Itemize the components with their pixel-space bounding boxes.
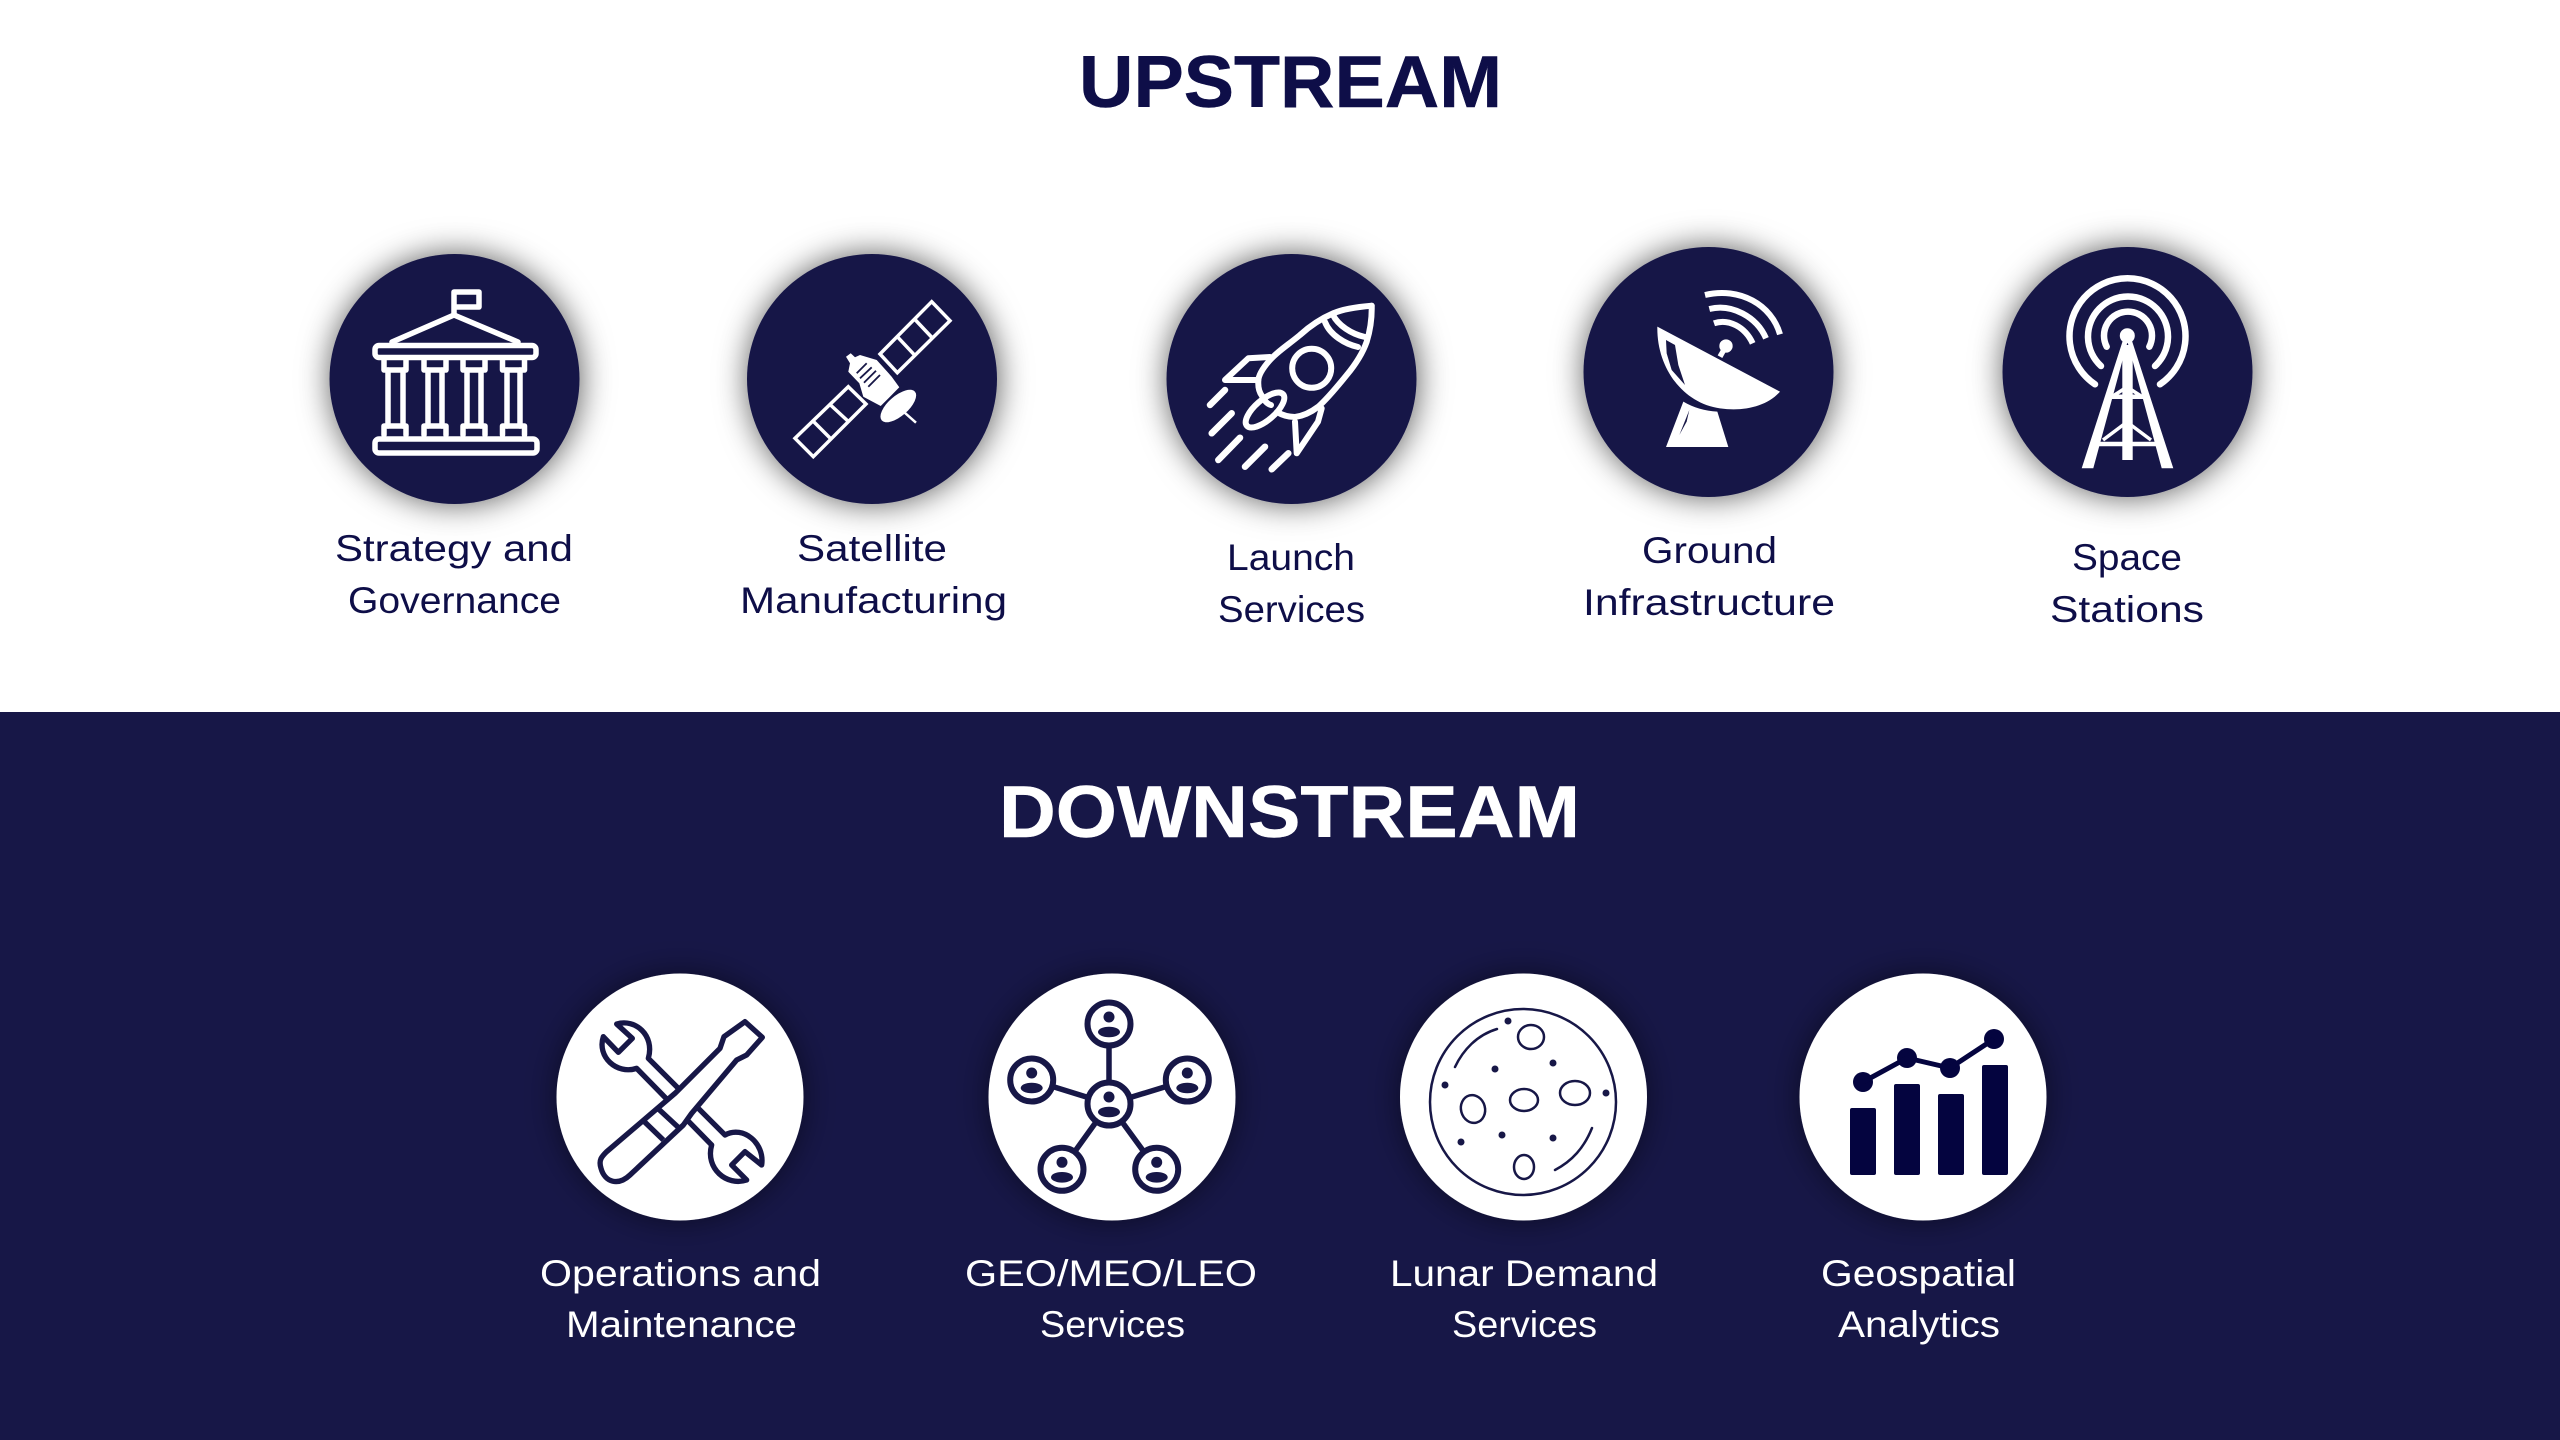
label: space stations: Stations [2050, 589, 2204, 630]
label: operations and maintenance: Maintenance [566, 1304, 797, 1345]
label: space stations: Space [2072, 537, 2182, 578]
item: strategy and governance [330, 254, 580, 621]
icon: bar chart with trend line [1800, 974, 2046, 1220]
label: launch services: Launch [1227, 537, 1355, 578]
icon: moon [1400, 974, 1647, 1220]
item: lunar demand services [1390, 974, 1658, 1345]
label: strategy and governance: Governance [348, 580, 561, 621]
label: launch services [1218, 537, 1365, 630]
panel: downstream [0, 712, 2560, 1440]
label: ground infrastructure: Ground [1642, 530, 1777, 571]
label: operations and maintenance: Operations and [540, 1253, 821, 1294]
label: ground infrastructure [1583, 530, 1835, 623]
label: space stations [2050, 537, 2204, 630]
label: lunar demand services: Services [1452, 1304, 1597, 1345]
icon: satellite [747, 254, 997, 504]
icon: rocket [1166, 254, 1416, 504]
label: satellite manufacturing: Satellite [797, 528, 947, 569]
label: operations and maintenance [540, 1253, 821, 1345]
label: geo meo leo services: Services [1040, 1304, 1185, 1345]
label: lunar demand services: Lunar Demand [1390, 1253, 1658, 1294]
item: geospatial analytics [1800, 974, 2046, 1345]
label: geospatial analytics [1821, 1253, 2016, 1345]
label: strategy and governance [335, 528, 573, 621]
label: launch services: Services [1218, 589, 1365, 630]
label: geo meo leo services: GEO/MEO/LEO [965, 1253, 1257, 1294]
label: geospatial analytics: Analytics [1838, 1304, 2000, 1345]
item: satellite manufacturing [740, 254, 1007, 621]
item: launch services [1166, 254, 1416, 630]
panel: upstream [0, 0, 2560, 712]
label: strategy and governance: Strategy and [335, 528, 573, 569]
label: geospatial analytics: Geospatial [1821, 1253, 2016, 1294]
item: operations and maintenance [540, 974, 821, 1345]
label: ground infrastructure: Infrastructure [1583, 582, 1835, 623]
icon: satellite dish [1584, 247, 1834, 497]
heading: upstream: UPSTREAM [1079, 42, 1502, 123]
label: satellite manufacturing: Manufacturing [740, 580, 1007, 621]
label: satellite manufacturing [740, 528, 1007, 621]
item: ground infrastructure [1583, 247, 1835, 623]
item: geo meo leo services [965, 974, 1257, 1345]
icon: radio tower [2002, 247, 2252, 497]
label: lunar demand services [1390, 1253, 1658, 1345]
heading: downstream: DOWNSTREAM [999, 772, 1580, 853]
icon: user network [988, 974, 1236, 1220]
icon: government building [330, 254, 580, 504]
icon: wrench and screwdriver [556, 974, 804, 1220]
label: geo meo leo services [965, 1253, 1257, 1345]
item: space stations [2002, 247, 2252, 630]
